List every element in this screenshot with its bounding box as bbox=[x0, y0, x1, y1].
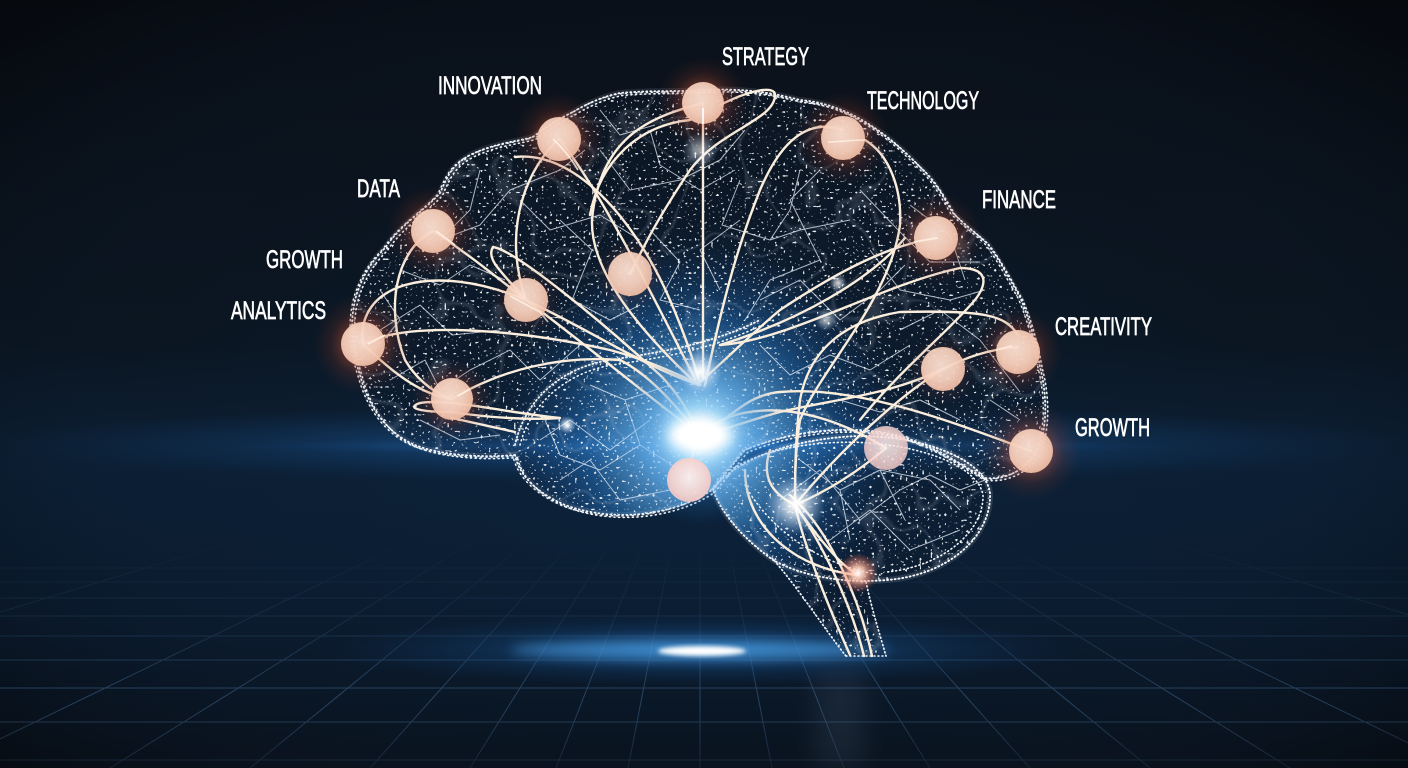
perspective floor grid bbox=[0, 567, 1408, 768]
brainstem outline bbox=[772, 558, 886, 656]
label: technology: TECHNOLOGY bbox=[867, 87, 979, 115]
node: growth right bbox=[1009, 429, 1053, 473]
node: lower center bbox=[667, 458, 711, 502]
label: creativity: CREATIVITY bbox=[1055, 313, 1152, 341]
label: growth left: GROWTH bbox=[266, 246, 343, 274]
brain wireframe bbox=[340, 80, 1060, 670]
brain interior texture bbox=[340, 80, 1060, 670]
node: innovation bbox=[537, 117, 581, 170]
cerebellum outline bbox=[713, 436, 990, 581]
node: right inner bbox=[921, 347, 965, 391]
label: growth right: GROWTH bbox=[1075, 414, 1150, 442]
label: data: DATA bbox=[357, 175, 400, 203]
node: finance bbox=[914, 216, 958, 260]
node: data bbox=[411, 209, 455, 253]
label: innovation: INNOVATION bbox=[438, 72, 542, 100]
floor light glow bbox=[320, 614, 1080, 768]
node: center left upper bbox=[608, 252, 652, 296]
node: growth left bbox=[431, 378, 473, 420]
node: lower right bbox=[864, 426, 908, 470]
brain veins bbox=[375, 110, 1020, 550]
node: creativity bbox=[996, 330, 1040, 374]
connection fibers bbox=[362, 90, 1031, 656]
node: strategy bbox=[682, 82, 724, 124]
node: analytics bbox=[341, 322, 385, 366]
central light hub bbox=[558, 132, 878, 593]
node glows bbox=[313, 57, 1081, 501]
label: finance: FINANCE bbox=[982, 186, 1056, 214]
cerebrum outline bbox=[350, 89, 1048, 517]
node: technology bbox=[821, 116, 865, 160]
label: strategy: STRATEGY bbox=[722, 43, 809, 71]
label: analytics: ANALYTICS bbox=[231, 297, 326, 325]
node: center left lower bbox=[504, 278, 548, 322]
